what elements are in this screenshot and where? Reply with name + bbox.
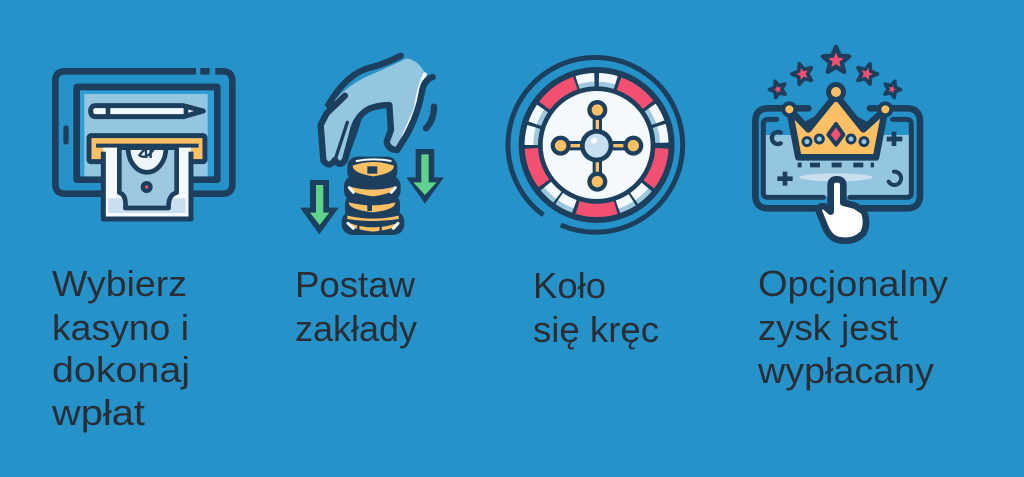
step 1 text: Wybierz	[52, 263, 187, 304]
step 2 text: Postaw	[295, 264, 416, 305]
step 1 text: wpłat	[51, 392, 145, 433]
step 2 text: zakłady	[295, 308, 417, 349]
icon: roulette wheel	[502, 51, 691, 239]
step 1 text: dokonaj	[52, 349, 190, 390]
step 3 text: się kręc	[533, 309, 659, 350]
step 2 text	[295, 264, 417, 349]
coin stack	[342, 157, 404, 235]
stars	[767, 47, 903, 99]
step 4 text: wypłacany	[757, 350, 934, 391]
pointing hand	[818, 179, 866, 241]
icon: ATM tablet dispensing banknote	[55, 71, 232, 219]
icon: hand placing coins with arrows	[300, 56, 444, 235]
step 1 text: kasyno i	[52, 307, 189, 348]
arrows	[406, 149, 444, 204]
step 4 text: Opcjonalny	[758, 263, 948, 304]
step 4 text	[757, 263, 948, 391]
game screen	[755, 108, 920, 208]
step 1 text	[51, 263, 190, 433]
step 3 text	[533, 265, 659, 350]
crown	[781, 82, 893, 157]
step 4 text: zysk jest	[758, 307, 898, 348]
step 3 text: Koło	[533, 265, 606, 306]
icon: crown on game screen with stars and pointing hand	[755, 47, 920, 241]
